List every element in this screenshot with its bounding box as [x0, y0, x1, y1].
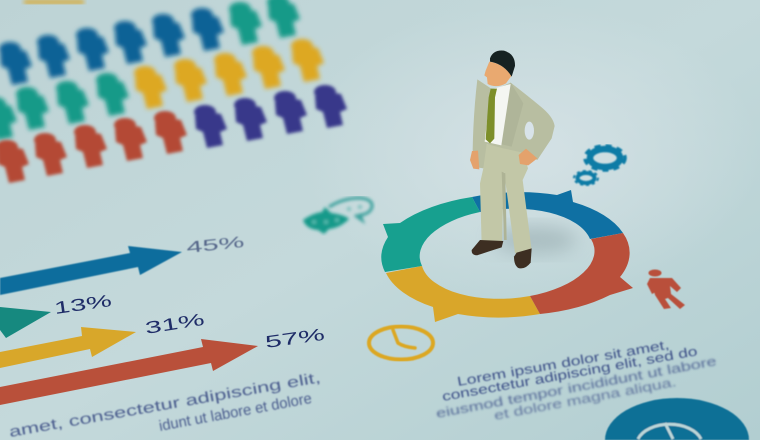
teal arrow 13%	[0, 291, 113, 338]
pictogram people chart	[0, 0, 347, 183]
small gear	[574, 171, 598, 185]
right hand	[519, 149, 537, 165]
teal arrow 13%: 13%	[53, 291, 113, 318]
miniature businessman figure	[470, 50, 555, 268]
filled bubble	[303, 207, 349, 234]
left hand	[470, 151, 479, 169]
arm gap	[525, 122, 534, 140]
tie	[486, 89, 497, 143]
segment: blue	[472, 190, 623, 239]
bubble dots	[347, 205, 362, 211]
top cropped yellow bar	[24, 0, 84, 4]
icon: red person	[647, 270, 685, 309]
arrow chart	[0, 234, 326, 405]
filled bubble dots	[312, 218, 339, 224]
big gear	[585, 146, 625, 170]
segment: teal	[381, 197, 480, 272]
red arrow 57%: 57%	[264, 325, 326, 352]
row 3 people	[0, 85, 347, 183]
line 1: Lorem ipsum dolor sit amet,	[456, 337, 670, 389]
left paragraph text: idunt ut labore et dolore	[158, 390, 313, 435]
left paragraph text	[8, 369, 322, 440]
segment: red	[530, 233, 633, 314]
left paragraph text: amet, consectetur adipiscing elit,	[8, 369, 322, 440]
line 3: eiusmod tempor incididunt ut labore	[435, 353, 718, 421]
icon: speech bubbles	[303, 198, 372, 234]
trouser fold shading	[502, 172, 507, 240]
trousers	[480, 143, 532, 253]
right paragraph text	[435, 337, 718, 423]
donut ring chart	[381, 190, 633, 322]
yellow arrow 31%	[0, 310, 206, 368]
head	[484, 62, 511, 86]
hair	[490, 50, 515, 77]
blue arrow 45%	[0, 234, 245, 295]
row 1 people	[0, 0, 300, 85]
icon: blue circle chart cropped at bottom	[605, 398, 749, 440]
line 4: et dolore magna aliqua.	[493, 374, 677, 423]
left shoe	[472, 240, 503, 255]
right shoe	[514, 248, 532, 268]
icon: clock	[369, 326, 433, 360]
soft shadow of figure on ring	[493, 226, 577, 254]
line 2: consectetur adipiscing elit, sed do	[441, 343, 698, 404]
segment: yellow	[386, 266, 540, 322]
icon: gears	[574, 146, 625, 185]
jacket shading	[500, 83, 523, 147]
jacket	[473, 79, 555, 168]
yellow arrow 31%: 31%	[144, 310, 206, 338]
red arrow 57%	[0, 325, 326, 405]
blue arrow 45%: 45%	[186, 234, 245, 257]
shirt	[485, 84, 511, 145]
outline bubble	[329, 198, 372, 220]
row 2 people	[0, 39, 324, 140]
